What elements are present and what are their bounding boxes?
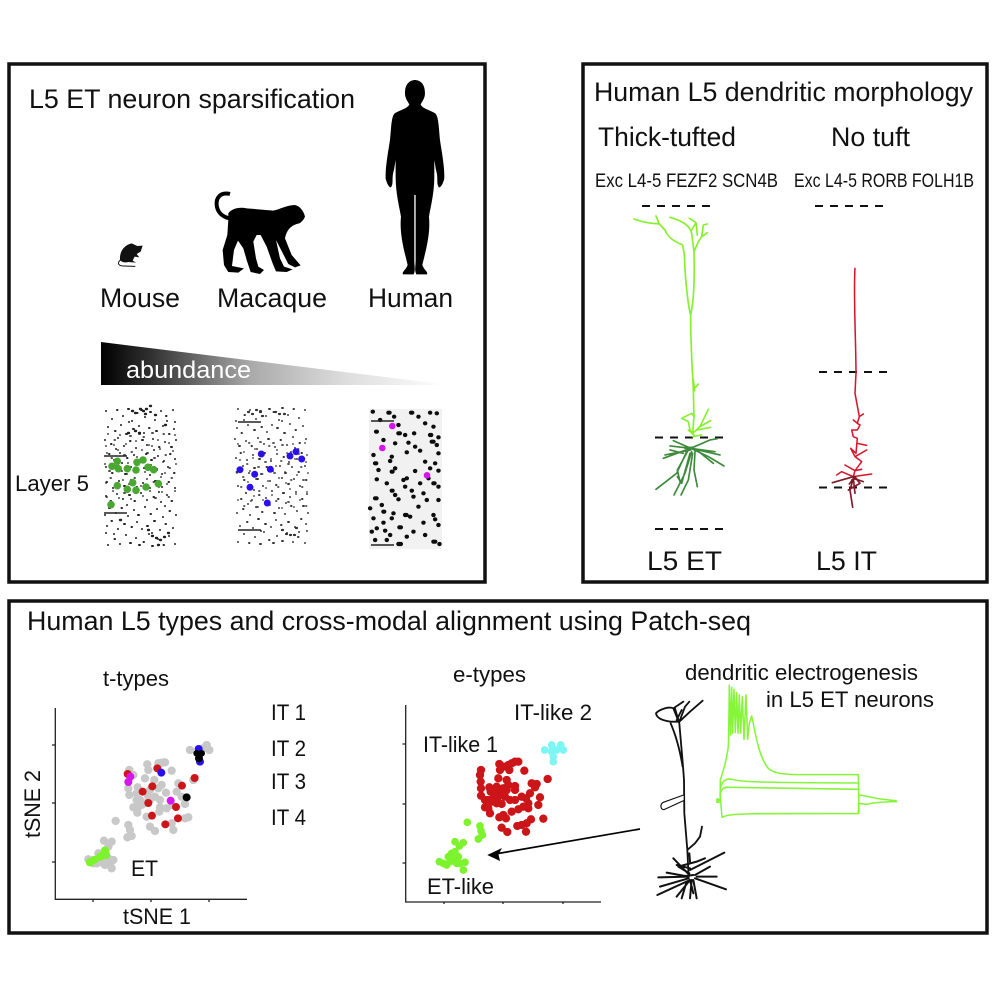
caption: in L5 ET neurons: in L5 ET neurons (766, 687, 934, 712)
label: L5 IT: L5 IT (816, 546, 877, 576)
arrow: patch-seq neuron to ET-like cluster (487, 829, 640, 861)
axis label: tSNE 2: tSNE 2 (20, 770, 45, 838)
label: ET-like: ET-like (427, 874, 494, 899)
neuron: L5 IT no tuft (832, 268, 872, 507)
label: Human: Human (368, 283, 453, 313)
heading: No tuft: No tuft (831, 122, 910, 152)
panel title: Human L5 dendritic morphology (594, 77, 973, 107)
mouse layer 5 micrograph (104, 406, 176, 546)
panel: L5 ET neuron sparsification (9, 64, 485, 582)
abundance wedge (101, 342, 450, 385)
neuron: L5 ET thick-tufted (634, 216, 724, 495)
t-type scatter plot (52, 708, 247, 902)
macaque layer 5 micrograph (235, 408, 308, 544)
icon: mouse silhouette (118, 243, 143, 266)
panel title: Human L5 types and cross-modal alignment using Patch-seq (27, 606, 751, 636)
label: Macaque: Macaque (217, 283, 327, 313)
human layer 5 micrograph (369, 409, 442, 549)
panel title: L5 ET neuron sparsification (29, 84, 355, 114)
label: Mouse: Mouse (100, 283, 180, 313)
label: L5 ET: L5 ET (647, 546, 722, 576)
caption: dendritic electrogenesis: dendritic electrogenesis (685, 660, 918, 685)
icon: macaque silhouette (217, 194, 305, 274)
e-type scatter plot (402, 705, 601, 904)
chart: electrophysiology voltage traces (717, 685, 897, 817)
heading: e-types: e-types (453, 662, 526, 687)
legend: IT 2: IT 2 (271, 736, 306, 761)
heading: Thick-tufted: Thick-tufted (598, 122, 736, 152)
panel: Human L5 dendritic morphology (583, 64, 987, 582)
axis label: tSNE 1: tSNE 1 (123, 904, 191, 929)
legend: IT 1: IT 1 (271, 700, 306, 725)
heading: t-types: t-types (103, 666, 169, 691)
label: IT-like 2: IT-like 2 (514, 700, 592, 725)
label: Layer 5: Layer 5 (15, 471, 89, 496)
legend: IT 4: IT 4 (271, 805, 306, 830)
icon: human silhouette (386, 80, 444, 274)
legend: IT 3: IT 3 (271, 769, 306, 794)
label: ET: ET (131, 856, 158, 881)
panel: Human L5 types and cross-modal alignment (9, 601, 987, 933)
label: FEZF2 SCN4B type: Exc L4-5 FEZF2 SCN4B (595, 170, 778, 192)
abundance wedge: abundance (126, 357, 251, 384)
neuron with patch pipette (656, 701, 726, 898)
label: IT-like 1: IT-like 1 (423, 732, 498, 757)
